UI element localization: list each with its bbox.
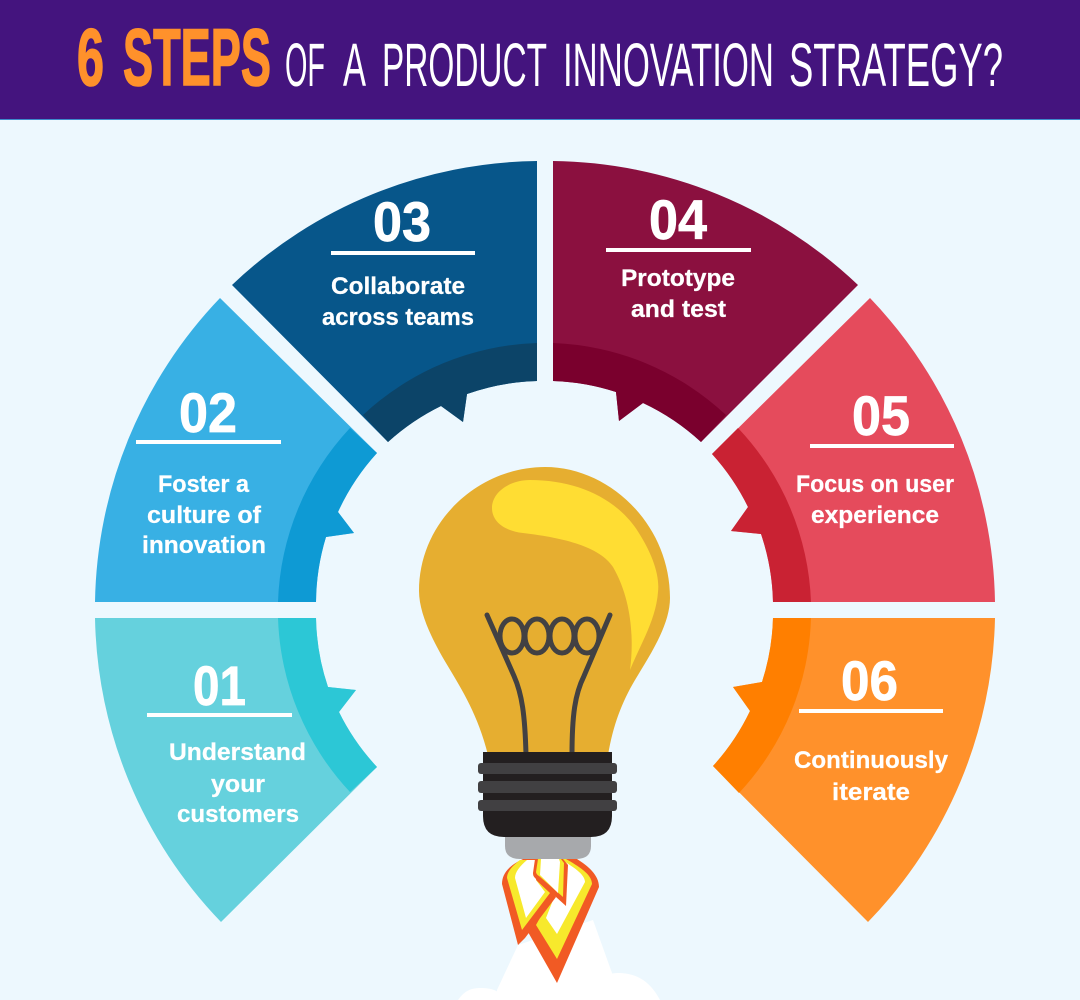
text: foster a culture of innovation	[142, 471, 266, 559]
number 03: 03	[373, 190, 431, 253]
text: foster a culture of innovation: Foster a	[158, 471, 250, 498]
text: continuously iterate: iterate	[832, 779, 910, 806]
icon: light bulb	[419, 467, 670, 859]
text: collaborate across teams	[322, 273, 474, 331]
text: foster a culture of innovation: culture of	[147, 502, 262, 529]
number 02: 02	[179, 381, 237, 444]
title: A	[343, 31, 366, 99]
filament	[487, 615, 610, 755]
icon: rocket flames	[502, 859, 599, 983]
text: foster a culture of innovation: innovation	[142, 532, 266, 559]
text: understand your customers	[169, 739, 306, 828]
text: continuously iterate: Continuously	[794, 747, 949, 774]
panel: step 05	[712, 298, 995, 602]
text: prototype and test	[621, 265, 735, 323]
text: understand your customers: Understand	[169, 739, 306, 766]
screw base	[478, 752, 617, 837]
text: collaborate across teams: across teams	[322, 304, 474, 331]
icon: rocket smoke	[458, 920, 660, 1000]
number 01: 01	[193, 654, 246, 717]
number 04: 04	[649, 188, 707, 251]
text: collaborate across teams: Collaborate	[331, 273, 465, 300]
bulb neck	[505, 836, 591, 859]
panel: step 04	[553, 161, 858, 442]
bulb highlight	[492, 480, 658, 670]
number 06: 06	[841, 649, 898, 712]
text: prototype and test: and test	[631, 296, 726, 323]
title: 6	[77, 13, 104, 103]
text: focus on user experience: experience	[811, 502, 939, 529]
title: INNOVATION	[563, 31, 774, 99]
text: focus on user experience: Focus on user	[796, 471, 954, 498]
text: understand your customers: your	[211, 771, 265, 798]
text: understand your customers: customers	[177, 801, 299, 828]
title: OF	[285, 31, 325, 99]
header banner	[0, 0, 1080, 120]
title	[77, 13, 1003, 103]
panel: step 01	[95, 618, 377, 922]
bulb glass	[419, 467, 670, 755]
text: prototype and test: Prototype	[621, 265, 735, 292]
number 05: 05	[852, 384, 910, 447]
text: focus on user experience	[796, 471, 954, 529]
panel: step 03	[232, 161, 537, 442]
panel: step 06	[713, 618, 995, 922]
panel: step 02	[95, 298, 377, 602]
title: STEPS	[123, 13, 271, 103]
text: continuously iterate	[794, 747, 949, 806]
title: PRODUCT	[382, 31, 547, 99]
